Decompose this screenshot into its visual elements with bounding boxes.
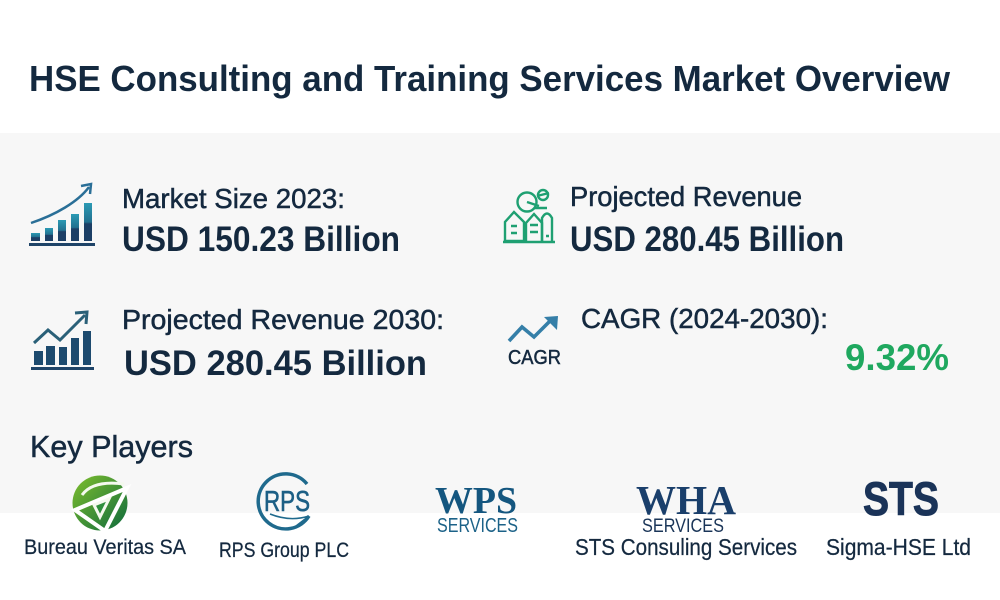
logo: WHA Services: WHA (636, 477, 736, 523)
logo: WPS Services: SERVICES (437, 515, 518, 537)
panel: projected revenue (503, 181, 844, 259)
icon: bar chart with zigzag arrow (31, 312, 94, 370)
logo: STS: STS (863, 472, 939, 525)
heading: key players: Key Players (30, 429, 193, 464)
label: projected revenue: Projected Revenue (570, 181, 802, 212)
logo: green circle emblem (72, 476, 128, 531)
panel: market overview background (0, 133, 1000, 513)
value: market size: USD 150.23 Billion (122, 220, 400, 259)
key player: Sigma-HSE Ltd (826, 472, 971, 560)
label: market size: Market Size 2023: (122, 183, 345, 214)
key player: Sigma-HSE Ltd: Sigma-HSE Ltd (826, 534, 971, 560)
icon: rising bar chart (29, 184, 95, 246)
key player: RPS Group PLC: RPS Group PLC (219, 539, 349, 562)
panel: market size 2023 (29, 183, 400, 259)
key player: RPS Group PLC (219, 474, 349, 562)
panel: projected revenue 2030 (31, 304, 444, 383)
key player: STS Consuling Services: STS Consuling Services (575, 534, 797, 560)
logo: RPS ring: RPS (264, 486, 310, 518)
title: HSE Consulting and Training Services Market Overview (29, 58, 951, 99)
icon: CAGR arrow (508, 316, 561, 369)
value: CAGR: 9.32% (845, 337, 949, 378)
value: projected revenue: USD 280.45 Billion (570, 220, 844, 259)
panel: CAGR (508, 303, 949, 378)
logo: WHA Services: SERVICES (642, 516, 724, 537)
key player: Bureau Veritas SA (24, 476, 186, 559)
value: projected revenue 2030: USD 280.45 Billion (124, 344, 427, 383)
label: CAGR: CAGR (2024-2030): (581, 303, 828, 334)
icon: CAGR arrow: CAGR (508, 347, 561, 369)
icon: green buildings and targets (503, 190, 555, 242)
key player: STS Consuling Services (575, 477, 797, 560)
logo: WPS Services: WPS (435, 480, 517, 522)
label: projected revenue 2030: Projected Revenue 2030: (122, 304, 444, 335)
key player: Bureau Veritas SA: Bureau Veritas SA (24, 536, 186, 559)
